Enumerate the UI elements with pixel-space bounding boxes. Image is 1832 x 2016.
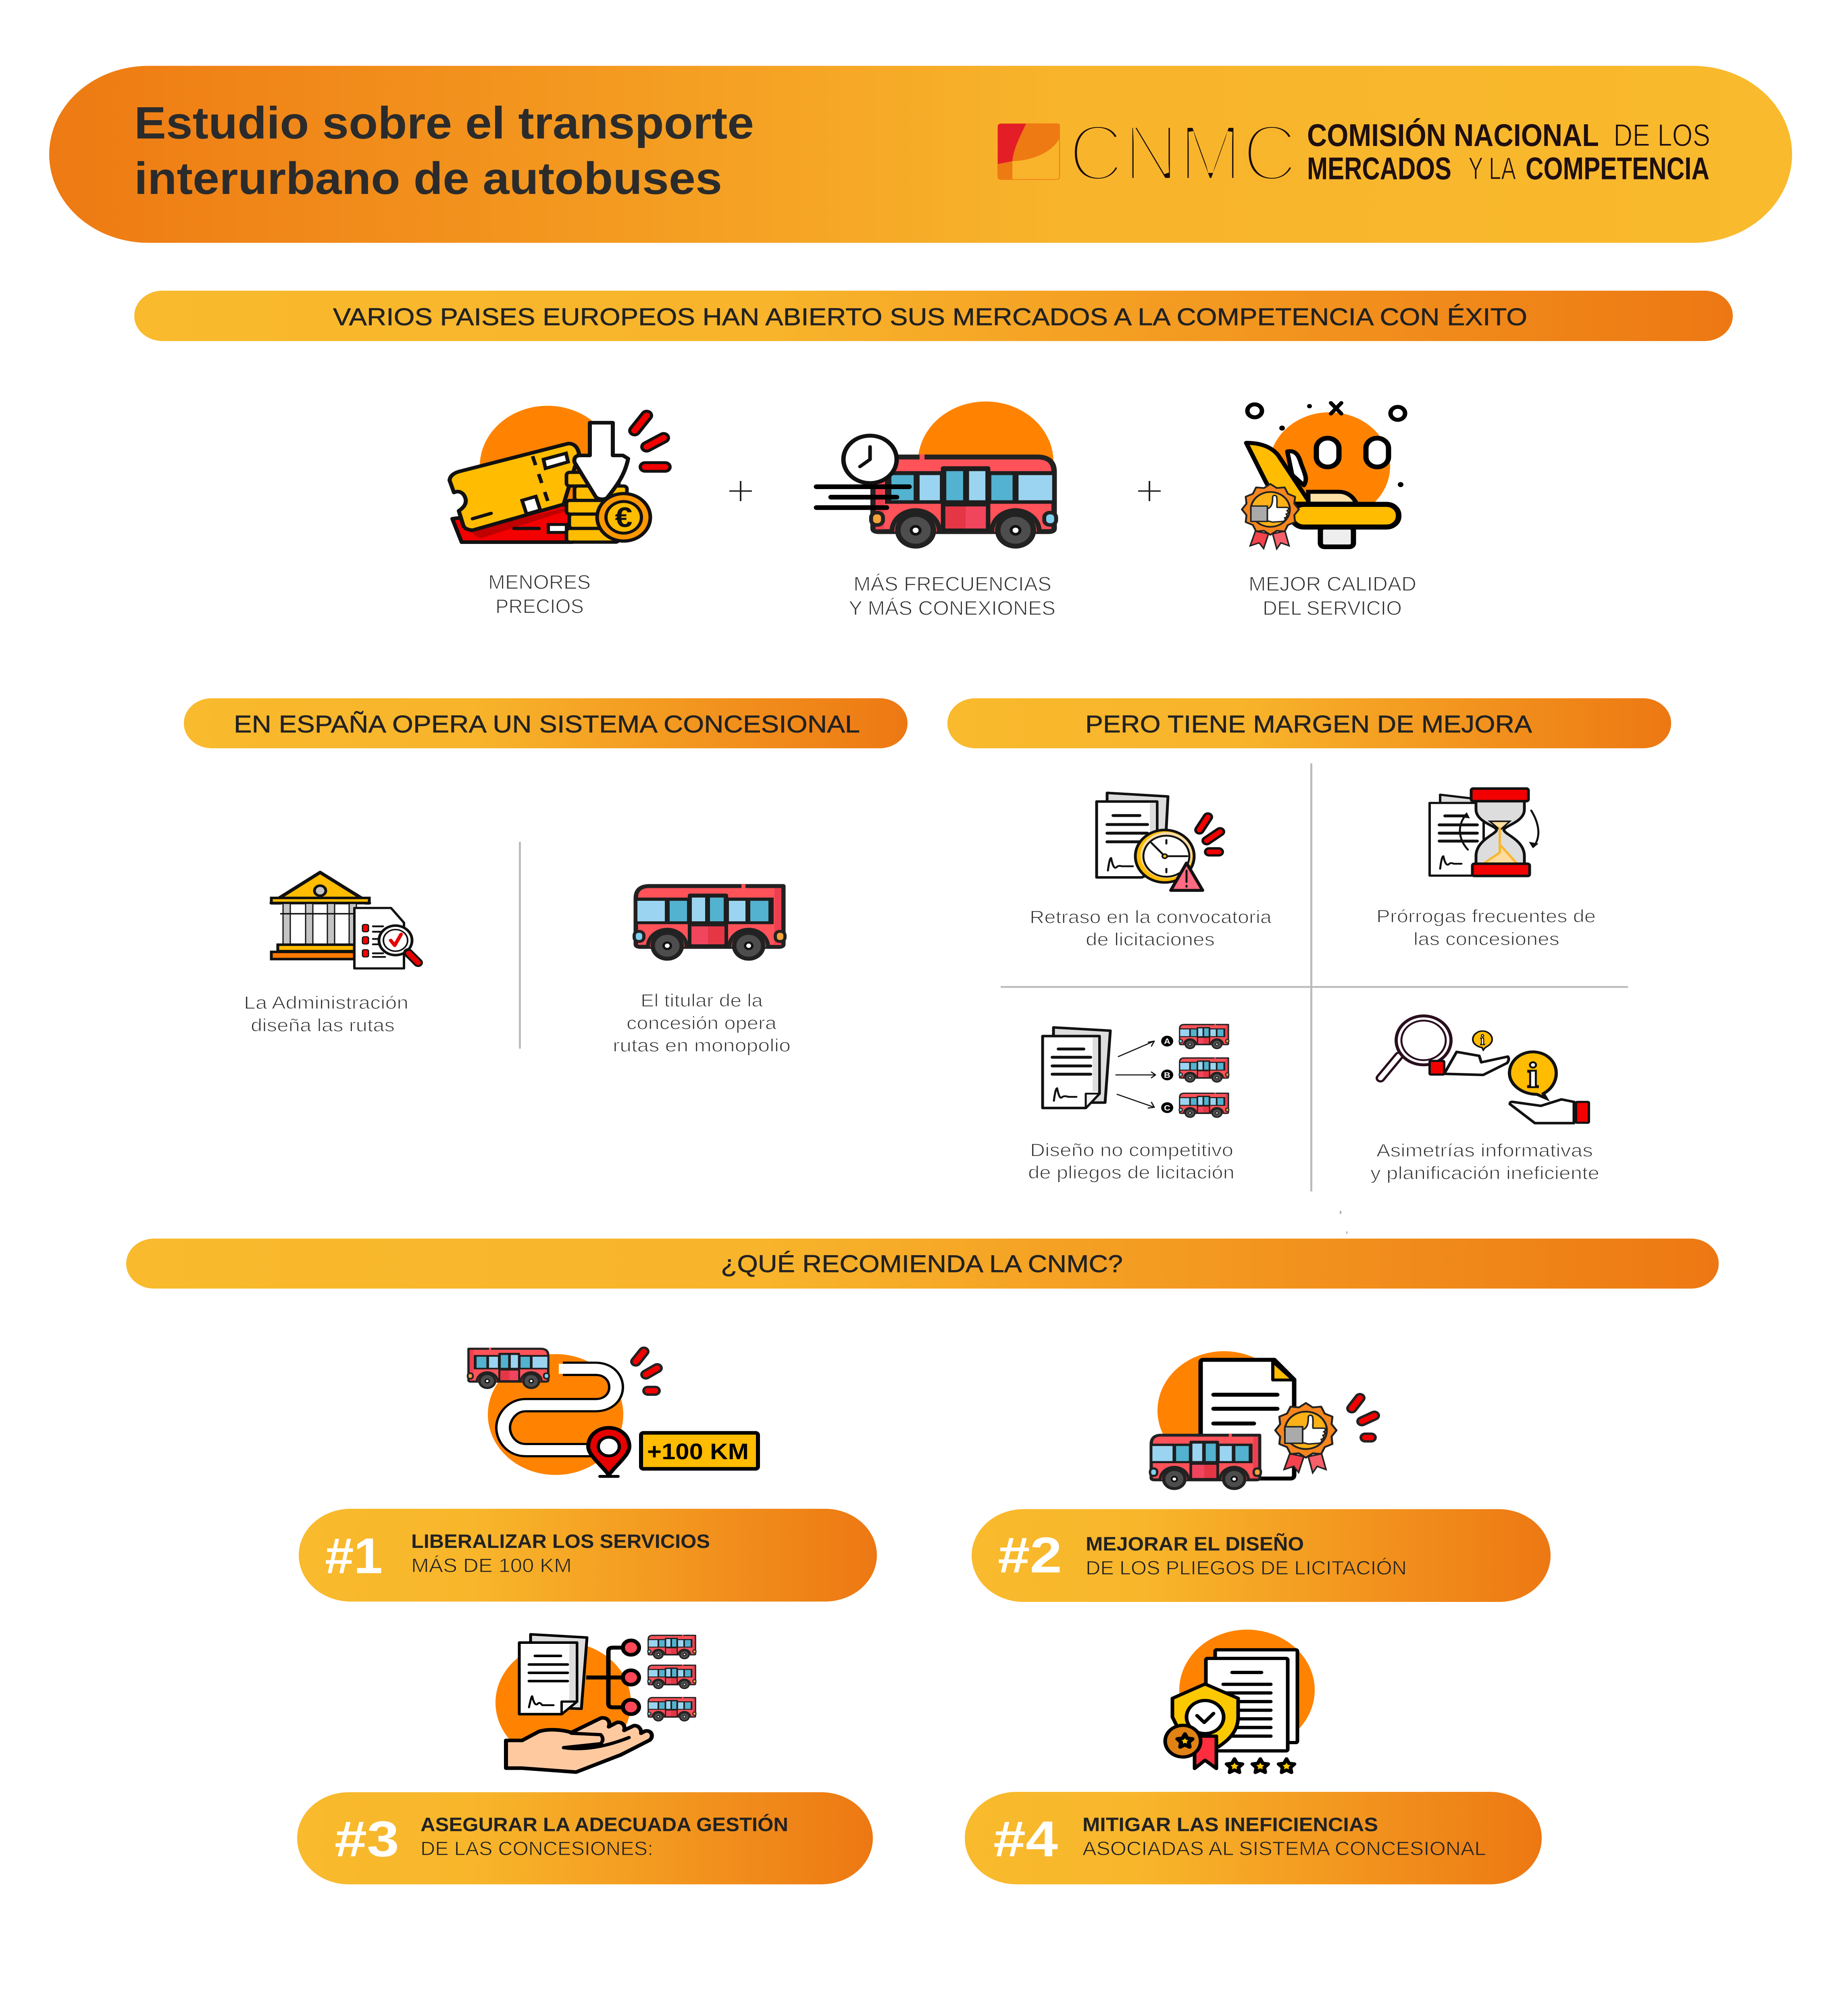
section bar: room for improvement: PERO TIENE MARGEN DE MEJORA [1085, 710, 1532, 738]
label: more frequencies: MÁS FRECUENCIAS [854, 573, 1051, 595]
recommendation 2 pill: MEJORAR EL DISEÑO [1086, 1533, 1304, 1555]
recommendation 4 icon: shield, documents and stars [1165, 1630, 1315, 1772]
label: administration: La Administración [244, 993, 408, 1013]
icon: document and hourglass [1430, 789, 1538, 876]
recommendation 4 pill: #4 [993, 1811, 1058, 1867]
label: lower prices [488, 571, 591, 618]
CNMC logo: COMISIÓN NACIONAL [1307, 118, 1599, 153]
recommendation 3 icon: hand, documents and buses [495, 1634, 696, 1772]
icon: document to three bus options: A [1164, 1037, 1170, 1046]
label: information asymmetries [1370, 1141, 1599, 1183]
item: concession holder operates [613, 884, 791, 1056]
label: lower prices: MENORES [488, 571, 591, 594]
icon: government building with checklist [271, 873, 418, 968]
label: non competitive design: de pliegos de licitación [1028, 1162, 1235, 1183]
label: delay: de licitaciones [1086, 929, 1215, 950]
icon: ticket, coins and down arrow: € [615, 502, 633, 533]
label: extensions [1376, 906, 1596, 949]
section bar: concession system [184, 698, 908, 748]
recommendation 2 pill: DE LOS PLIEGOS DE LICITACIÓN [1086, 1557, 1407, 1579]
label: administration: diseña las rutas [251, 1015, 395, 1035]
label: administration [244, 993, 408, 1035]
recommendation 1 pill [299, 1509, 877, 1602]
item: non competitive design [1028, 1024, 1235, 1183]
label: better quality [1249, 573, 1416, 619]
benefit: lower prices [450, 406, 665, 618]
section bar: room for improvement [947, 698, 1671, 748]
title: Estudio sobre el transporte [134, 98, 754, 148]
recommendation 3 pill: ASEGURAR LA ADECUADA GESTIÓN [421, 1814, 788, 1835]
title [134, 98, 754, 204]
section bar: concession system: EN ESPAÑA OPERA UN SISTEMA CONCESIONAL [234, 710, 860, 738]
section bar: european countries [134, 291, 1733, 341]
sign: +100 KM [641, 1433, 758, 1469]
recommendation 4 pill: ASOCIADAS AL SISTEMA CONCESIONAL [1083, 1838, 1486, 1860]
recommendation 1 icon: route over 100 km [468, 1347, 758, 1477]
label: non competitive design [1028, 1140, 1235, 1183]
item: information asymmetries [1370, 1016, 1599, 1183]
icon: document to three bus options: B [1164, 1071, 1170, 1080]
label: lower prices: PRECIOS [495, 596, 584, 618]
recommendation 4 pill [965, 1792, 1542, 1884]
header banner [49, 66, 1792, 243]
recommendation 3 pill [297, 1792, 873, 1884]
icon: document to three bus options [1043, 1024, 1229, 1117]
label: extensions: Prórrogas frecuentes de [1376, 906, 1596, 927]
icon: magnifier, hands and info bubbles: i [1480, 1032, 1485, 1048]
CNMC logo: CNMC [1068, 108, 1297, 198]
recommendation 3 pill: DE LAS CONCESIONES: [421, 1838, 653, 1860]
label: more frequencies: Y MÁS CONEXIONES [849, 597, 1055, 619]
CNMC logo: DE LOS [1613, 118, 1710, 153]
plus sign [1138, 481, 1161, 501]
label: information asymmetries: y planificación ineficiente [1370, 1163, 1599, 1183]
icon: bus [634, 884, 785, 959]
label: extensions: las concesiones [1414, 929, 1559, 949]
recommendation 4 pill: MITIGAR LAS INEFICIENCIAS [1083, 1814, 1378, 1835]
title: interurbano de autobuses [134, 153, 722, 204]
icon: document to three bus options: C [1164, 1104, 1170, 1112]
label: more frequencies [849, 573, 1055, 619]
icon: magnifier, hands and info bubbles: i [1527, 1056, 1538, 1095]
item: administration designs routes [244, 873, 418, 1035]
icon: fast bus with clock [816, 402, 1056, 546]
icon: seat with quality badge [1242, 403, 1405, 549]
plus sign [729, 481, 752, 501]
label: concession holder: concesión opera [627, 1013, 777, 1033]
benefit: better quality [1242, 403, 1416, 619]
section bar: european countries: VARIOS PAISES EUROPEOS HAN ABIERTO SUS MERCADOS A LA COMPETENCIA CON ÉXITO [333, 303, 1527, 331]
sign: +100 KM: +100 KM [647, 1439, 749, 1464]
section bar: CNMC recommendations: ¿QUÉ RECOMIENDA LA CNMC? [721, 1250, 1123, 1277]
label: delay [1030, 907, 1272, 950]
label: concession holder: rutas en monopolio [613, 1035, 791, 1056]
label: concession holder: El titular de la [641, 991, 763, 1011]
label: non competitive design: Diseño no competitivo [1030, 1140, 1233, 1160]
recommendation 2 icon: document, bus and badge [1150, 1351, 1374, 1489]
benefit: more frequencies [816, 402, 1056, 619]
label: better quality: MEJOR CALIDAD [1249, 573, 1416, 595]
item: delay in calls for tenders [1030, 793, 1272, 950]
icon: ticket, coins and down arrow [450, 406, 665, 542]
CNMC logo [998, 108, 1710, 198]
recommendation 2 pill [972, 1509, 1551, 1602]
icon: magnifier, hands and info bubbles [1380, 1016, 1589, 1123]
recommendation 1 pill: LIBERALIZAR LOS SERVICIOS [411, 1531, 710, 1552]
CNMC logo: MERCADOS [1307, 151, 1451, 186]
label: concession holder [613, 991, 791, 1056]
section bar: CNMC recommendations [126, 1239, 1719, 1289]
CNMC logo: Y LA [1468, 151, 1516, 186]
recommendation 1 pill: #1 [325, 1528, 383, 1584]
icon: document, clock and warning [1097, 793, 1220, 890]
item: frequent extensions [1376, 789, 1596, 949]
label: delay: Retraso en la convocatoria [1030, 907, 1272, 927]
CNMC logo: COMPETENCIA [1526, 151, 1709, 186]
recommendation 2 pill: #2 [998, 1527, 1062, 1583]
recommendation 3 pill: #3 [335, 1811, 399, 1867]
label: better quality: DEL SERVICIO [1263, 597, 1402, 619]
label: information asymmetries: Asimetrías informativas [1376, 1141, 1593, 1161]
recommendation 1 pill: MÁS DE 100 KM [411, 1555, 572, 1576]
